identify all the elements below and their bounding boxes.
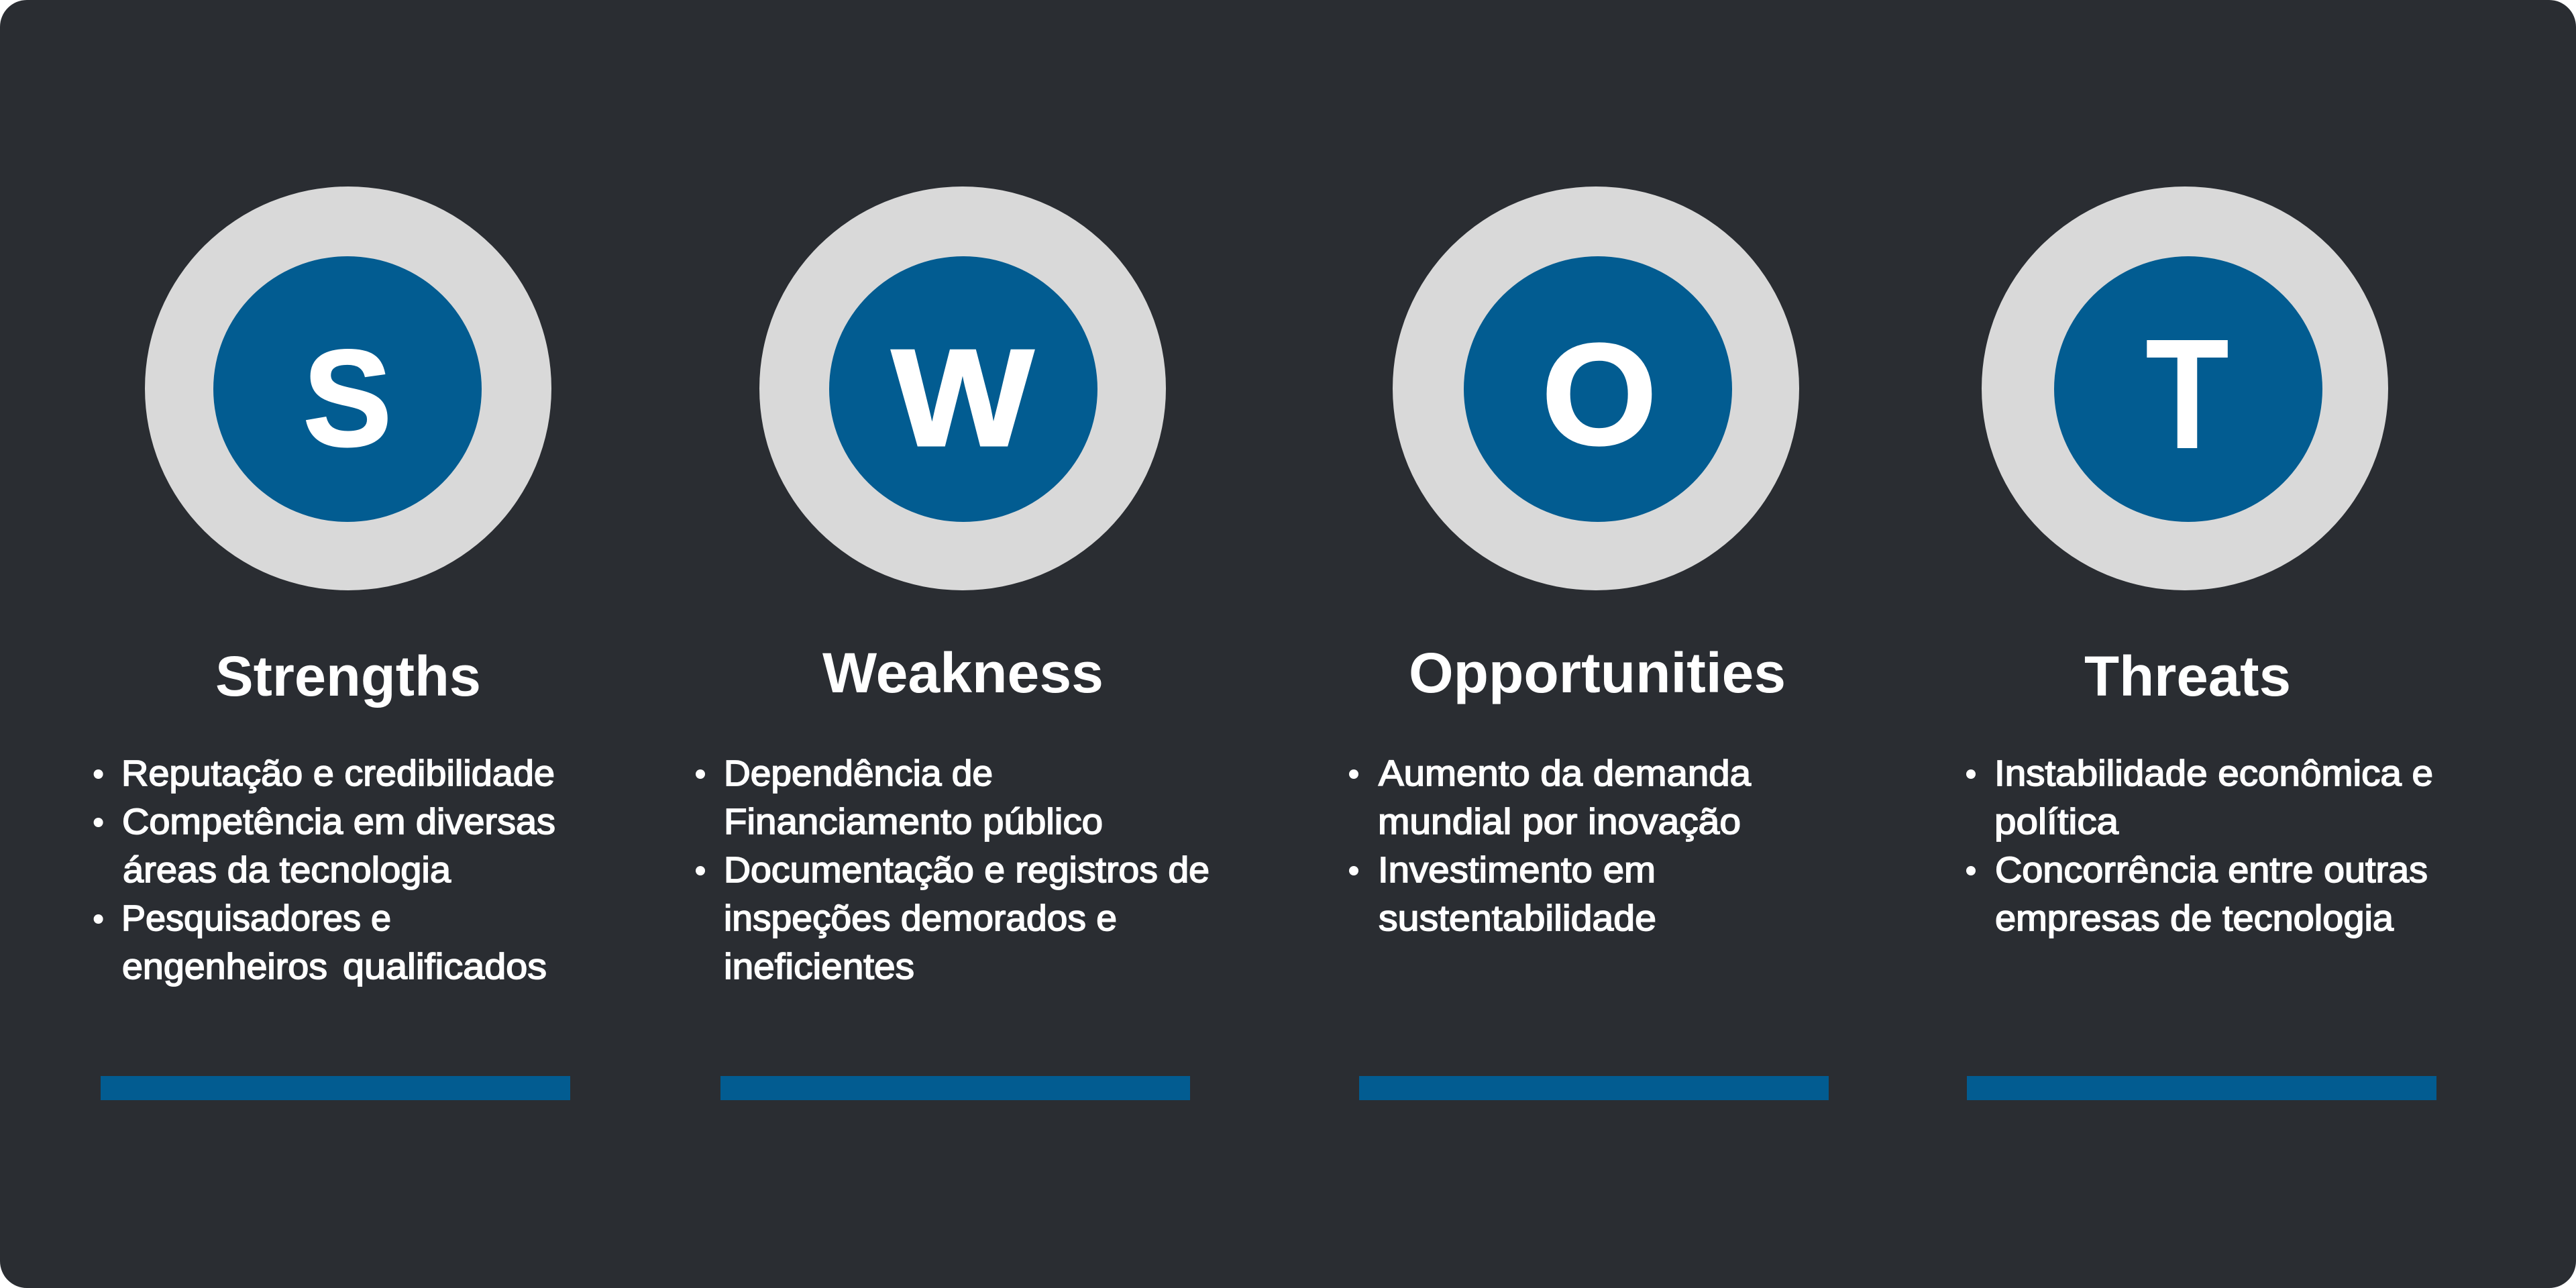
list: threats items: política — [1994, 802, 2119, 842]
list: opportunities items — [1349, 753, 1752, 938]
list: strengths items: Competência em diversas — [122, 802, 555, 842]
panel: threats — [1966, 186, 2436, 1100]
list: weakness items: Documentação e registros de — [724, 850, 1210, 890]
accent bar — [1967, 1076, 2436, 1100]
list: strengths items: áreas da tecnologia — [123, 850, 451, 890]
heading: Weakness: Weakness — [822, 641, 1104, 704]
list: weakness items — [696, 753, 1210, 987]
list: weakness items: Dependência de — [724, 753, 993, 794]
list: opportunities items: mundial por inovação — [1378, 802, 1741, 842]
panel: strengths — [94, 186, 570, 1100]
icon: O circle: O — [1542, 313, 1657, 475]
heading: Strengths: Strengths — [215, 645, 481, 708]
list: weakness items: ineficientes — [724, 947, 914, 987]
icon: O circle — [1393, 186, 1799, 590]
list: strengths items: Reputação e credibilidade — [121, 753, 555, 794]
icon: W circle — [759, 186, 1166, 590]
icon: T circle — [1982, 186, 2388, 590]
list: threats items: Concorrência entre outras — [1995, 850, 2428, 890]
icon: S circle — [145, 186, 551, 590]
list: opportunities items: Investimento em — [1378, 850, 1656, 890]
list: threats items — [1966, 753, 2433, 938]
list: threats items: Instabilidade econômica e — [1994, 753, 2433, 794]
accent bar — [1359, 1076, 1829, 1100]
panel: weakness — [696, 186, 1210, 1100]
accent bar — [101, 1076, 570, 1100]
list: weakness items: Financiamento público — [724, 802, 1103, 842]
list: opportunities items: sustentabilidade — [1379, 898, 1656, 938]
list: opportunities items: Aumento da demanda — [1379, 753, 1752, 794]
heading: Opportunities: Opportunities — [1409, 641, 1786, 704]
list: weakness items: inspeções demorados e — [724, 898, 1117, 938]
list: strengths items: Pesquisadores e — [121, 898, 391, 938]
list: strengths items: qualificados — [343, 947, 547, 987]
list: strengths items — [94, 753, 555, 987]
icon: T circle: T — [2145, 306, 2229, 482]
accent bar — [720, 1076, 1190, 1100]
heading: Threats: Threats — [2084, 645, 2291, 708]
panel: opportunities — [1349, 186, 1829, 1100]
list: strengths items: engenheiros — [122, 947, 327, 987]
icon: S circle: S — [303, 322, 392, 475]
icon: W circle: W — [892, 321, 1034, 475]
list: threats items: empresas de tecnologia — [1995, 898, 2394, 938]
